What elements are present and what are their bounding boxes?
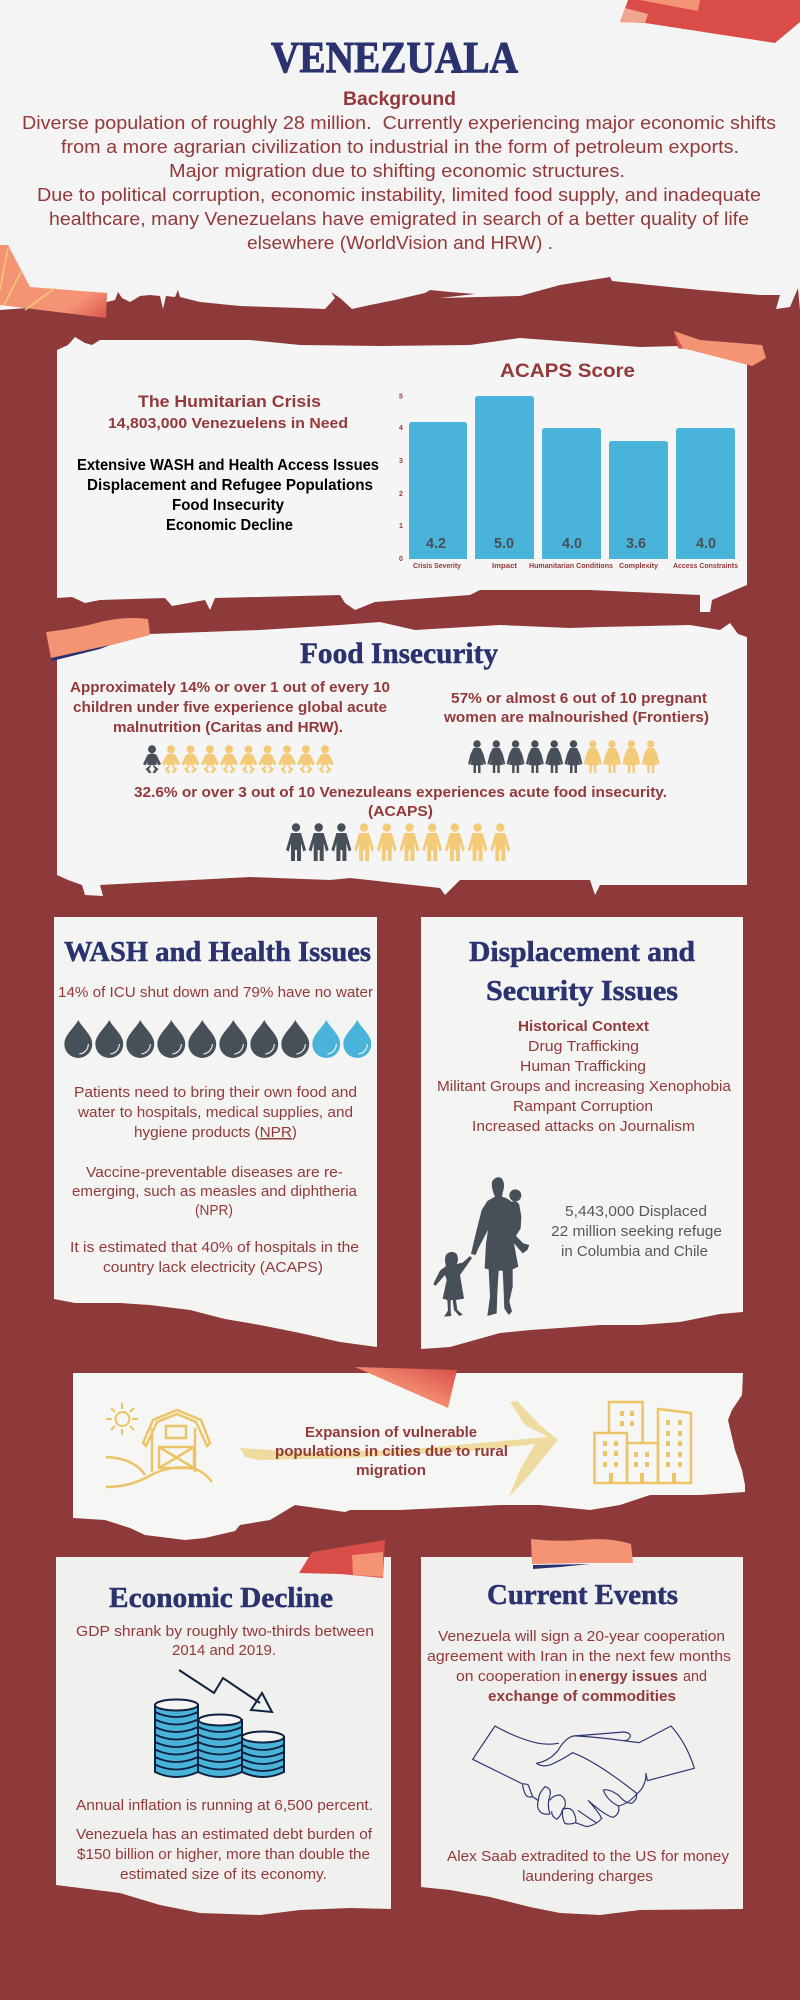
debt text: estimated size of its economy.	[120, 1867, 327, 1883]
bar chart: ACAPS score: Crisis Severity	[413, 563, 461, 570]
background text block: Due to political corruption, economic instability, limited food supply, and inadequate	[37, 184, 761, 205]
displacement heading	[469, 936, 695, 1007]
historical context list: Increased attacks on Journalism	[472, 1119, 695, 1135]
bar chart: ACAPS score: Impact	[492, 563, 518, 570]
tape: top right	[620, 0, 800, 43]
arrow: migration direction	[240, 1401, 558, 1497]
debt text: $150 billion or higher, more than double the	[77, 1847, 370, 1863]
ICU stat: 14% of ICU shut down and 79% have no water	[58, 985, 373, 1001]
historical context list: Drug Trafficking	[528, 1039, 639, 1055]
pictogram: people	[286, 823, 510, 861]
GDP text: GDP shrank by roughly two-thirds between	[76, 1624, 374, 1640]
pictogram: babies	[143, 745, 334, 773]
bar chart: ACAPS score: Access Constraints	[673, 563, 738, 570]
stat: children: children under five experience global acute	[73, 700, 387, 716]
displaced stats: 22 million seeking refuge	[551, 1224, 722, 1240]
displacement heading: Displacement and	[469, 936, 695, 968]
chart heading: ACAPS Score	[500, 361, 635, 382]
bar chart: ACAPS score: 5.0	[494, 535, 514, 552]
icon: sun	[106, 1403, 138, 1435]
background text block: elsewhere (WorldVision and HRW) .	[247, 232, 553, 253]
displaced stats: in Columbia and Chile	[561, 1244, 708, 1260]
inflation text: Annual inflation is running at 6,500 percent.	[76, 1798, 373, 1814]
historical context list: Historical Context	[518, 1019, 649, 1035]
tape: food panel	[46, 618, 150, 661]
icon: coin stacks	[155, 1700, 284, 1777]
displacement heading: Security Issues	[486, 975, 678, 1007]
bar chart: ACAPS score: 2	[399, 491, 403, 498]
stat: children: Approximately 14% or over 1 out of every 10	[70, 680, 390, 696]
current events heading: Current Events	[487, 1580, 678, 1611]
debt text	[76, 1827, 373, 1883]
patients text: Patients need to bring their own food and	[74, 1085, 357, 1101]
stat: pregnant women: 57% or almost 6 out of 10 pregnant	[451, 691, 707, 707]
icon: handshake	[473, 1726, 694, 1827]
patients text: hygiene products ( NPR)	[134, 1125, 297, 1141]
panel: humanitarian crisis	[57, 337, 747, 612]
background text block: Diverse population of roughly 28 million. Currently experiencing major economic shifts	[22, 112, 776, 133]
electricity text	[70, 1240, 359, 1276]
historical context list	[437, 1019, 732, 1135]
stat: general population: (ACAPS)	[368, 804, 433, 820]
Alex Saab text	[447, 1849, 730, 1885]
historical context list: Human Trafficking	[520, 1059, 646, 1075]
GDP text: 2014 and 2019.	[172, 1643, 276, 1659]
Iran agreement text: and	[683, 1669, 707, 1685]
crisis list: Extensive WASH and Health Access Issues	[77, 457, 379, 474]
bar chart: ACAPS score: 5	[399, 394, 403, 400]
Alex Saab text: Alex Saab extradited to the US for money	[447, 1849, 730, 1865]
panel: economic decline	[56, 1540, 391, 1915]
crisis heading: The Humitarian Crisis	[138, 392, 321, 411]
Iran agreement text	[427, 1629, 731, 1705]
patients text: water to hospitals, medical supplies, and	[77, 1105, 353, 1121]
background text block	[22, 89, 776, 253]
patients text	[74, 1085, 357, 1141]
food heading: Food Insecurity	[300, 637, 498, 670]
bar chart: ACAPS score	[399, 394, 738, 570]
Iran agreement text: on cooperation in	[456, 1669, 577, 1685]
bar chart: ACAPS score: 3	[399, 458, 403, 465]
panel: WASH and health	[54, 917, 377, 1347]
title: VENEZUALA	[271, 33, 518, 82]
Iran agreement text: agreement with Iran in the next few months	[427, 1649, 731, 1665]
migration text: Expansion of vulnerable	[305, 1425, 477, 1441]
pictogram: water drops	[64, 1020, 371, 1058]
panel: current events	[421, 1539, 743, 1915]
tape: economic panel	[299, 1540, 385, 1578]
Iran agreement text: energy issues	[579, 1669, 678, 1685]
debt text: Venezuela has an estimated debt burden of	[76, 1827, 373, 1843]
bar chart: ACAPS score: 4.0	[562, 535, 582, 552]
icon: city	[594, 1402, 691, 1483]
panel: food insecurity	[57, 622, 747, 896]
migration text: populations in cities due to rural	[275, 1444, 508, 1460]
WASH heading: WASH and Health Issues	[64, 936, 371, 968]
icon: mother and children silhouette	[433, 1177, 529, 1317]
bar chart: ACAPS score: 1	[399, 523, 403, 530]
economic heading: Economic Decline	[109, 1583, 333, 1614]
stat: children: malnutrition (Caritas and HRW).	[113, 720, 343, 736]
tape: current events	[531, 1539, 633, 1569]
tape: migration panel	[355, 1367, 457, 1408]
pictogram: women	[468, 740, 660, 773]
icon: barn	[106, 1410, 212, 1487]
historical context list: Rampant Corruption	[513, 1099, 653, 1115]
bar chart: ACAPS score: 4.0	[696, 535, 716, 552]
background text block: healthcare, many Venezuelans have emigrated in search of a better quality of life	[49, 208, 749, 229]
stat: children	[70, 680, 390, 736]
background text block: Background	[343, 89, 456, 110]
background text block: Major migration due to shifting economic structures.	[169, 160, 625, 181]
displaced stats: 5,443,000 Displaced	[565, 1204, 707, 1220]
stat: general population	[134, 785, 667, 820]
displaced stats	[551, 1204, 722, 1260]
vaccine text: Vaccine-preventable diseases are re-	[86, 1165, 343, 1181]
crisis list: Food Insecurity	[172, 497, 284, 514]
background text block: from a more agrarian civilization to industrial in the form of petroleum exports.	[61, 136, 739, 157]
panel: displacement and security	[421, 917, 743, 1349]
Alex Saab text: laundering charges	[522, 1869, 653, 1885]
icon: declining arrow	[179, 1670, 272, 1712]
bar chart: ACAPS score: 4	[399, 425, 403, 432]
vaccine text: emerging, such as measles and diphtheria	[72, 1184, 358, 1200]
crisis list: Economic Decline	[166, 517, 293, 534]
electricity text: It is estimated that 40% of hospitals in the	[70, 1240, 359, 1256]
stat: pregnant women	[443, 691, 709, 726]
bar chart: ACAPS score: 0	[399, 556, 403, 563]
vaccine text: (NPR)	[195, 1203, 233, 1219]
bar chart: ACAPS score: 4.2	[426, 535, 446, 552]
migration text	[275, 1425, 508, 1479]
historical context list: Militant Groups and increasing Xenophobia	[437, 1079, 732, 1095]
GDP text	[76, 1624, 374, 1659]
bar chart: ACAPS score: Humanitarian Conditions	[529, 563, 613, 570]
Iran agreement text: exchange of commodities	[488, 1689, 676, 1705]
tape: panel 1 corner	[674, 331, 766, 366]
stat: general population: 32.6% or over 3 out of 10 Venezuleans experiences acute food insecurity.	[134, 785, 667, 801]
bar chart: ACAPS score: 3.6	[626, 535, 646, 552]
crisis list	[77, 457, 379, 534]
background header paper	[0, 0, 800, 340]
electricity text: country lack electricity (ACAPS)	[103, 1260, 323, 1276]
crisis list: Displacement and Refugee Populations	[87, 477, 373, 494]
bar chart: ACAPS score: Complexity	[619, 563, 658, 570]
vaccine text	[72, 1165, 358, 1219]
stat: pregnant women: women are malnourished (Frontiers)	[443, 710, 709, 726]
migration text: migration	[356, 1463, 426, 1479]
tape: left	[0, 245, 107, 318]
panel: rural to urban migration	[73, 1367, 745, 1540]
people in need: 14,803,000 Venezuelens in Need	[108, 416, 348, 432]
Iran agreement text: Venezuela will sign a 20-year cooperation	[438, 1629, 725, 1645]
